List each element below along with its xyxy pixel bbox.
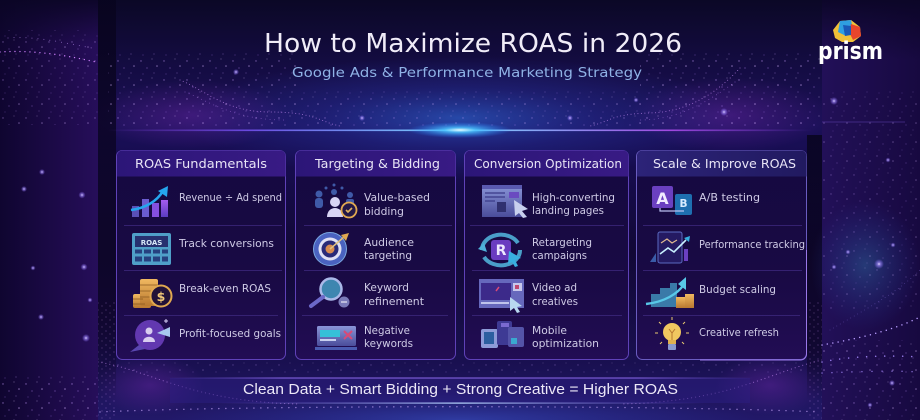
text: Retargeting campaigns: campaigns bbox=[532, 249, 587, 262]
icon: landing page and cursor bbox=[482, 185, 528, 218]
glowing divider bbox=[108, 122, 812, 138]
heading: ROAS Fundamentals bbox=[117, 150, 286, 176]
heading: Conversion Optimization: Conversion Optimization bbox=[474, 157, 622, 172]
text: Mobile optimization: Mobile bbox=[532, 324, 567, 337]
text: Negative keywords: keywords bbox=[364, 337, 413, 350]
icon: magnifier bbox=[311, 278, 350, 308]
icon: A/B testing bbox=[652, 186, 692, 215]
text: Keyword refinement bbox=[364, 281, 424, 308]
icon: profit goal bubble bbox=[130, 319, 170, 352]
heading: Scale & Improve ROAS bbox=[637, 150, 806, 176]
panel: ROAS Fundamentals bbox=[116, 150, 286, 360]
text: A/B testing: A/B testing bbox=[699, 191, 760, 204]
heading: Targeting & Bidding: Targeting & Bidding bbox=[314, 157, 440, 172]
text: Retargeting campaigns bbox=[532, 236, 592, 262]
text: Keyword refinement: refinement bbox=[364, 295, 424, 308]
text: Break-even ROAS: Break-even ROAS bbox=[179, 282, 271, 295]
icon: A/B testing: B bbox=[679, 198, 688, 210]
icon: retargeting loop R bbox=[478, 235, 521, 267]
heading: Scale & Improve ROAS: Scale & Improve ROAS bbox=[653, 157, 796, 172]
logo: prism bbox=[818, 20, 883, 65]
text: formula: Clean Data + Smart Bidding + Strong Creative = Higher ROAS bbox=[243, 381, 678, 398]
text: Keyword refinement: Keyword bbox=[364, 281, 409, 294]
icon: retargeting loop R: R bbox=[496, 243, 507, 259]
icon: rising bars and arrow bbox=[131, 186, 168, 217]
text: Profit-focused goals: Profit-focused goals bbox=[179, 327, 281, 340]
text: Budget scaling: Budget scaling bbox=[699, 283, 776, 296]
text: Negative keywords: Negative bbox=[364, 324, 410, 337]
text: Audience targeting bbox=[364, 236, 414, 262]
heading: Targeting & Bidding bbox=[296, 150, 456, 176]
text: High-converting landing pages: landing pages bbox=[532, 204, 604, 217]
icon: light bulb bbox=[655, 317, 689, 350]
text: Value-based bidding bbox=[364, 191, 430, 218]
heading: Conversion Optimization bbox=[465, 150, 628, 176]
text: Retargeting campaigns: Retargeting bbox=[532, 236, 592, 249]
icon: coins and dollar bbox=[133, 279, 172, 308]
text: Revenue ÷ Ad spend: Revenue ÷ Ad spend bbox=[179, 191, 282, 204]
text: Mobile optimization bbox=[532, 324, 599, 350]
right side strip bbox=[810, 0, 920, 420]
text: Mobile optimization: optimization bbox=[532, 337, 599, 350]
text: High-converting landing pages bbox=[532, 191, 615, 217]
text: Video ad creatives: creatives bbox=[532, 295, 578, 308]
icon: A/B testing: A bbox=[656, 189, 669, 208]
icon: negative keyword card bbox=[315, 326, 357, 350]
icon: target with arrow bbox=[314, 232, 349, 266]
text: Audience targeting: Audience bbox=[364, 236, 414, 249]
logo: prism: prism bbox=[818, 37, 883, 65]
icon: coins and dollar: $ bbox=[157, 289, 165, 304]
text: Negative keywords bbox=[364, 324, 413, 350]
text: High-converting landing pages: High-converting bbox=[532, 191, 615, 204]
text: Value-based bidding: Value-based bbox=[364, 191, 430, 204]
text: Track conversions: Track conversions bbox=[178, 237, 274, 250]
title: How to Maximize ROAS in 2026 bbox=[264, 29, 682, 59]
text: Video ad creatives bbox=[532, 281, 578, 308]
text: Creative refresh: Creative refresh bbox=[699, 326, 779, 339]
icon: performance tablet chart bbox=[650, 232, 690, 263]
icon: ROAS calculator: ROAS bbox=[141, 239, 162, 247]
text: Audience targeting: targeting bbox=[364, 249, 412, 262]
left side strip bbox=[0, 0, 98, 420]
panel: Targeting & Bidding bbox=[296, 150, 456, 360]
icon: mobile devices bbox=[481, 321, 524, 348]
icon: ROAS calculator bbox=[132, 233, 171, 265]
text: Video ad creatives: Video ad bbox=[532, 281, 577, 294]
panel: Conversion Optimization bbox=[464, 150, 628, 360]
text: Value-based bidding: bidding bbox=[364, 205, 404, 218]
icon: audience with badge bbox=[315, 184, 356, 218]
bottom banner bbox=[165, 378, 755, 404]
subtitle: Google Ads & Performance Marketing Strategy bbox=[292, 66, 642, 81]
text: Performance tracking: Performance tracking bbox=[699, 238, 805, 251]
heading: ROAS Fundamentals: ROAS Fundamentals bbox=[135, 157, 267, 172]
icon: budget scaling bbox=[646, 277, 694, 308]
panel: Scale & Improve ROAS bbox=[636, 150, 806, 360]
icon: video ad window bbox=[479, 279, 524, 313]
